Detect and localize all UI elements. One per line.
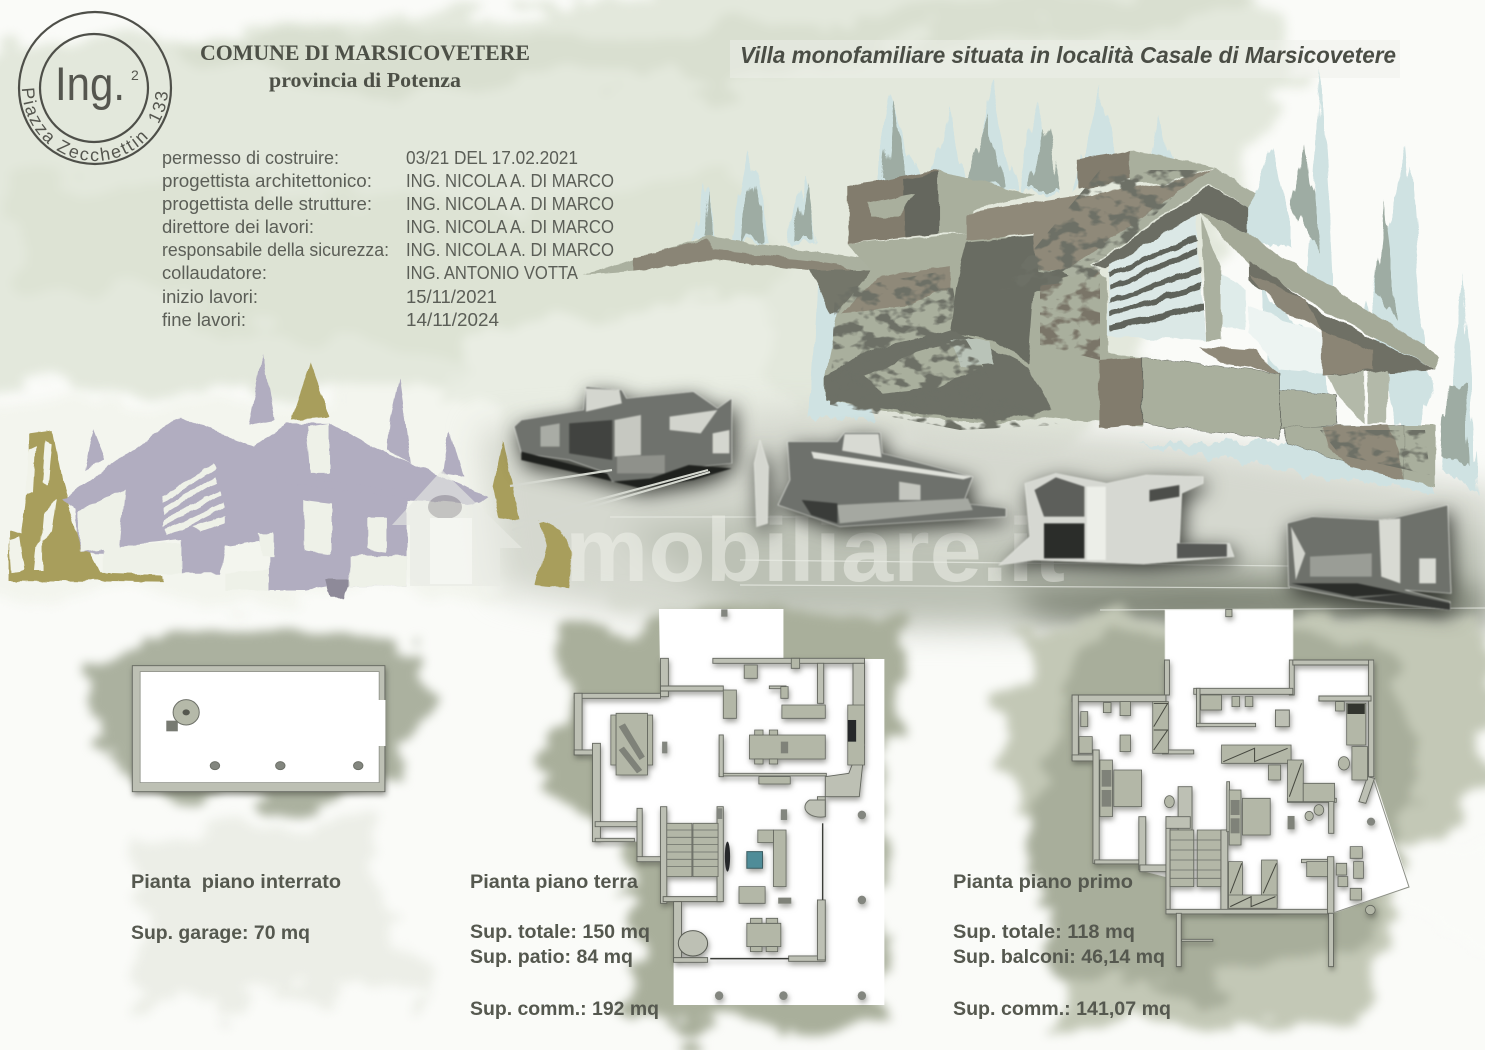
render 2	[754, 433, 1006, 527]
logo stamp: 2	[131, 67, 139, 83]
project data table: collaudatore:	[162, 263, 267, 283]
bedroom one	[1100, 760, 1142, 817]
label: piano primo	[953, 872, 1171, 1020]
service rooms	[723, 658, 825, 784]
house mottling texture	[830, 170, 1430, 475]
label: piano interrato	[131, 872, 341, 944]
label: piano primo: Sup. balconi: 46,14 mq	[953, 947, 1165, 968]
logo stamp: Ing.	[55, 57, 125, 110]
stairs	[1170, 830, 1221, 887]
gable louvre	[163, 463, 225, 537]
project data table: 14/11/2024	[406, 310, 499, 330]
cantilever roof	[583, 237, 882, 313]
label: piano terra: Sup. patio: 84 mq	[470, 947, 633, 968]
project data table: ING. NICOLA A. DI MARCO	[406, 240, 614, 260]
project data table: permesso di costruire:	[162, 148, 339, 168]
round entry	[805, 800, 825, 817]
living furniture	[725, 830, 791, 904]
logo stamp: Piazza Zecchettin 133	[22, 88, 168, 162]
bedroom two	[1229, 790, 1270, 845]
label: piano interrato: Pianta piano interrato	[131, 872, 341, 893]
dining table	[611, 713, 653, 775]
project data table: direttore dei lavori:	[162, 217, 314, 237]
watermark text: mobiliare.it	[565, 501, 1065, 601]
patio and interior columns	[662, 609, 866, 1000]
louvre window	[1108, 217, 1221, 340]
logo stamp	[18, 10, 172, 166]
window opening	[1221, 273, 1246, 330]
header: comune: COMUNE DI MARSICOVETERE	[200, 40, 530, 65]
label: piano interrato: Sup. garage: 70 mq	[131, 923, 310, 944]
olive trees	[10, 363, 574, 588]
project data table: 15/11/2021	[406, 287, 497, 307]
watermark house icon	[392, 470, 522, 586]
project data table: inizio lavori:	[162, 287, 258, 307]
header: comune: provincia di Potenza	[269, 68, 462, 92]
title block background	[730, 40, 1400, 78]
header: comune	[200, 40, 530, 92]
olive tree breaks	[10, 440, 57, 572]
balcony outline	[1333, 781, 1409, 913]
main staircase	[667, 823, 718, 877]
garage slab and walls	[132, 666, 385, 792]
project data table: ING. NICOLA A. DI MARCO	[406, 171, 614, 191]
plan white area	[574, 609, 884, 1005]
label: piano primo: Pianta piano primo	[953, 872, 1133, 893]
pale blue cypress trees	[693, 67, 1477, 493]
connector lines	[510, 470, 710, 530]
darker cypress trees	[702, 100, 1469, 467]
floor plan: piano interrato	[132, 666, 385, 792]
3D render views	[510, 387, 1451, 610]
spiral stair	[678, 931, 708, 956]
glazing lines	[710, 823, 823, 959]
spiral stair	[166, 700, 199, 731]
project data table: responsabile della sicurezza:	[162, 240, 389, 260]
light wall mass	[826, 233, 1142, 427]
first floor walls	[1072, 660, 1374, 967]
plan white area	[1072, 610, 1409, 913]
dark timber section	[950, 235, 1091, 363]
purple house body	[62, 417, 488, 590]
purple house illustration	[10, 355, 574, 598]
garage columns	[210, 762, 363, 770]
project data table: ING. NICOLA A. DI MARCO	[406, 194, 614, 214]
floor plan: piano terra	[574, 609, 884, 1005]
label: piano terra: Sup. comm.: 192 mq	[470, 999, 659, 1020]
wardrobes and closets	[1153, 702, 1368, 908]
thin white construction lines	[610, 517, 1485, 610]
left chimney block	[848, 170, 1035, 243]
render 3	[999, 473, 1234, 565]
project data table: ING. ANTONIO VOTTA	[406, 263, 578, 283]
purple trees	[84, 355, 464, 477]
house mass	[583, 150, 1441, 487]
label: piano terra: Pianta piano terra	[470, 872, 638, 893]
render 4	[1287, 505, 1451, 610]
project data table	[162, 148, 614, 330]
ground floor walls	[574, 658, 864, 962]
project title: Villa monofamiliare situata in località Casale di Marsicovetere	[740, 42, 1396, 68]
label: piano terra: Sup. totale: 150 mq	[470, 922, 650, 943]
project data table: ING. NICOLA A. DI MARCO	[406, 217, 614, 237]
lower wall blocks	[1099, 347, 1435, 487]
kitchen run	[848, 705, 864, 765]
master bedroom wardrobe	[1336, 702, 1366, 745]
loose furniture	[1165, 609, 1375, 915]
bathrooms	[1079, 695, 1328, 877]
floor plan: piano primo	[1072, 609, 1409, 967]
large watermark	[392, 470, 1065, 601]
roof plane	[967, 168, 1212, 270]
right chimney block	[1077, 150, 1215, 188]
gable barge boards	[1063, 167, 1255, 277]
label: piano terra	[470, 872, 659, 1020]
project data table: 03/21 DEL 17.02.2021	[406, 148, 578, 168]
kitchen island with stools	[749, 730, 825, 764]
render 1	[514, 387, 732, 488]
label: piano primo: Sup. totale: 118 mq	[953, 922, 1135, 943]
project data table: progettista architettonico:	[162, 171, 372, 191]
pale openings	[79, 423, 407, 590]
main house illustration	[583, 67, 1477, 493]
project data table: progettista delle strutture:	[162, 194, 372, 214]
project data table: fine lavori:	[162, 310, 246, 330]
label: piano primo: Sup. comm.: 141,07 mq	[953, 999, 1171, 1020]
patio dining table	[747, 918, 781, 952]
shaded hedge patches	[826, 330, 1051, 420]
